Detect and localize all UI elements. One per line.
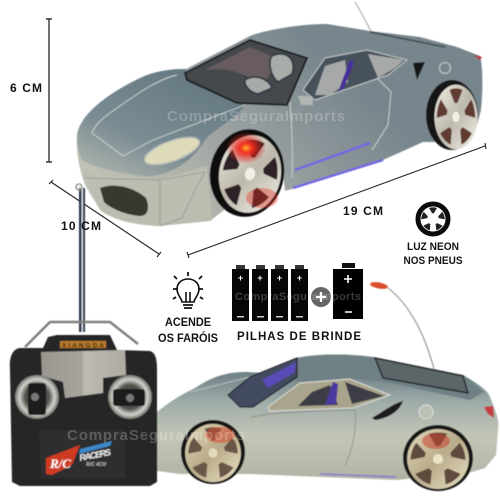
headlight <box>141 132 203 170</box>
remote body <box>10 335 157 486</box>
dimension: length 19 CM <box>187 143 486 258</box>
side vent <box>372 401 403 420</box>
label: luz neon nos pneus <box>404 241 462 267</box>
remote control <box>10 184 157 486</box>
neon underglow <box>320 474 396 477</box>
label: 19 CM: 19 CM <box>343 204 383 218</box>
battery 4: + <box>297 273 302 283</box>
top car hood <box>77 69 245 176</box>
label: luz neon nos pneus: LUZ NEON <box>407 241 459 253</box>
rim <box>434 85 478 149</box>
seat in side window <box>315 54 404 95</box>
windshield <box>185 40 307 105</box>
tyre <box>403 425 473 491</box>
battery 3: + <box>277 273 282 283</box>
label: acende os faróis <box>158 317 218 345</box>
front grille <box>100 186 148 216</box>
windshield <box>228 358 297 407</box>
icon: light bulb <box>173 272 203 308</box>
tyre <box>426 80 478 150</box>
battery 1: + <box>238 273 243 283</box>
label: 10 CM: 10 CM <box>61 219 101 233</box>
side window <box>268 379 390 411</box>
top car <box>77 2 482 226</box>
icon: wheel <box>418 204 448 234</box>
rooftop antenna wire <box>388 288 434 369</box>
red stripe <box>46 445 80 475</box>
watermark: CompraSeguraImports <box>67 427 245 444</box>
silver front bumper <box>84 166 212 226</box>
watermark: CompraSeguraImports <box>235 291 361 303</box>
roof panel <box>295 354 484 400</box>
fuel cap <box>440 62 450 74</box>
neon underglow <box>293 143 383 188</box>
windshield reflections and interior <box>205 47 280 85</box>
large battery <box>333 263 363 319</box>
bumper detail <box>84 172 205 226</box>
top car body <box>77 24 482 226</box>
side mirror <box>298 96 313 105</box>
door seam <box>290 78 391 178</box>
engine louvres <box>370 32 445 47</box>
label: acende os faróis: OS FARÓIS <box>158 332 218 345</box>
tyre <box>181 420 245 484</box>
rear glass <box>375 358 468 393</box>
RACERS lettering: RACERS <box>78 447 112 463</box>
red reflection <box>205 427 235 443</box>
left stick slot <box>28 383 46 415</box>
red LED glow <box>226 132 266 164</box>
label: pilhas de brinde: PILHAS DE BRINDE <box>237 331 361 343</box>
rear wheel <box>403 425 473 491</box>
silver panel <box>41 350 126 398</box>
dimension: width 10 CM <box>49 180 161 257</box>
brand plate: XIANGDA <box>62 342 104 350</box>
blue band <box>79 441 112 454</box>
carrying handle <box>25 322 138 347</box>
small lettering: R/C 4CH <box>86 462 106 468</box>
front panel <box>39 430 125 478</box>
telescopic antenna <box>76 184 85 332</box>
top car rooftop aerial <box>355 2 371 31</box>
lower car body <box>140 354 498 480</box>
watermark: CompraSeguraImports <box>167 108 345 125</box>
rim <box>407 429 469 489</box>
lower car <box>140 281 498 491</box>
steering and seat in windshield <box>245 54 293 94</box>
R/C racers logo <box>46 441 112 475</box>
tail light <box>474 55 482 60</box>
rear wheel <box>426 80 478 150</box>
icon: four small batteries and large battery <box>232 263 363 321</box>
right gimbal <box>108 375 152 419</box>
purple interior detail <box>338 60 354 92</box>
label: luz neon nos pneus: NOS PNEUS <box>404 255 462 267</box>
hood trim line <box>92 75 245 156</box>
lower wheel red reflection <box>246 188 278 208</box>
right stick slot <box>113 389 145 406</box>
label: 6 CM: 6 CM <box>10 81 42 95</box>
antenna red tip <box>370 281 388 290</box>
window interior <box>298 382 384 406</box>
tail light <box>484 406 494 418</box>
purple windshield reflection <box>262 362 296 388</box>
rim <box>185 424 241 482</box>
watermark <box>67 108 361 444</box>
fuel cap <box>419 405 433 419</box>
plus sign <box>311 287 331 307</box>
R/C lettering: R/C <box>49 456 71 471</box>
seat purple accent <box>325 382 338 405</box>
label: acende os faróis: ACENDE <box>165 317 211 329</box>
dimension: height 6 CM <box>46 19 52 162</box>
left gimbal <box>15 375 59 419</box>
front wheel <box>203 123 291 223</box>
front wheel <box>181 420 245 484</box>
side window <box>303 50 407 100</box>
rim <box>213 130 287 218</box>
door seam <box>240 410 355 470</box>
side vent <box>413 62 425 80</box>
hood line <box>190 377 250 392</box>
red reflection <box>422 433 450 449</box>
tyre <box>203 123 291 223</box>
battery 2: + <box>257 273 263 283</box>
